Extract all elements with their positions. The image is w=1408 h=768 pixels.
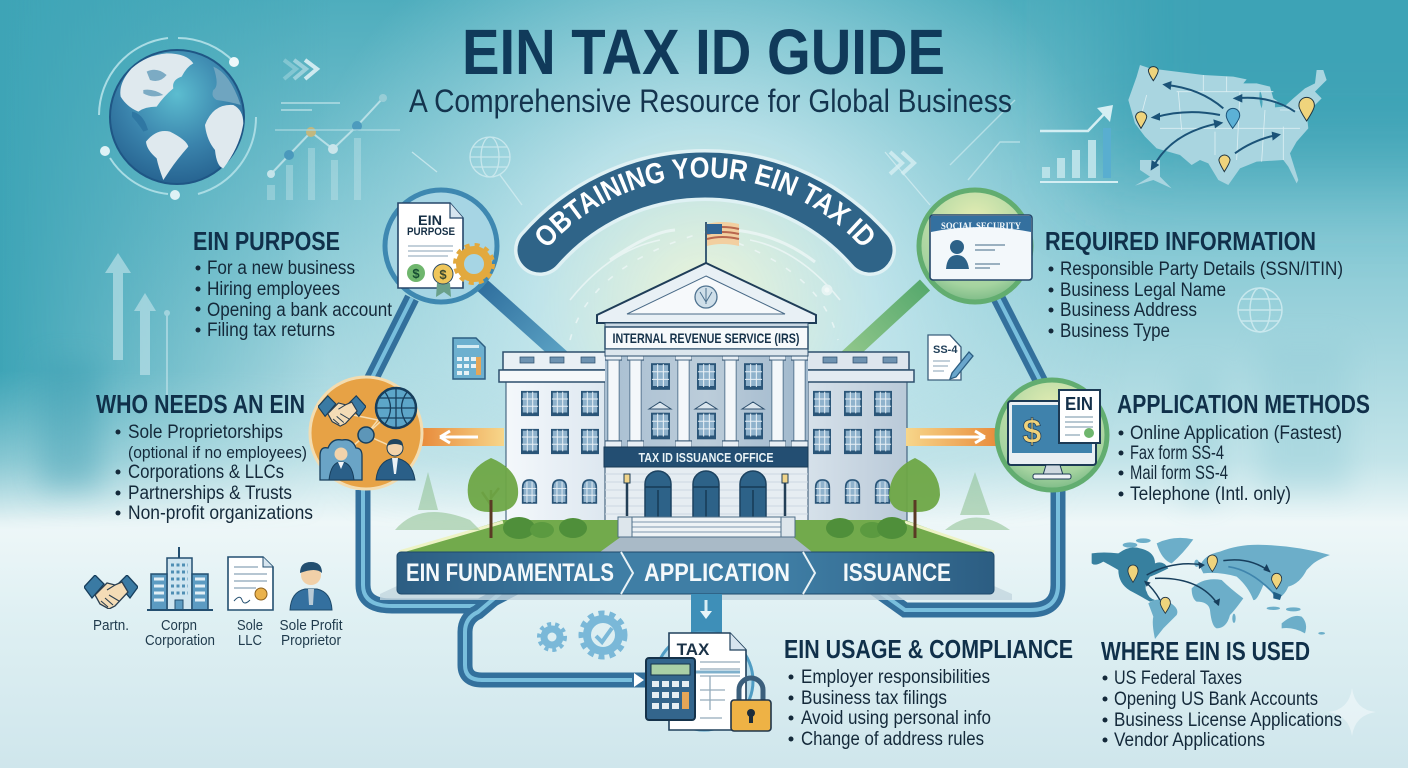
map: world — [1092, 538, 1330, 639]
columns — [605, 355, 808, 448]
label: Sole LLC: LLC — [238, 632, 262, 649]
section: EIN usage and compliance: EIN USAGE & COMPLIANCE — [784, 634, 1073, 664]
icon: handshake — [84, 575, 138, 609]
step: issuance: ISSUANCE — [843, 559, 951, 587]
icon row: entity types — [84, 547, 343, 649]
distant trees — [395, 472, 1010, 530]
icon: application methods circle: $ — [1023, 413, 1042, 451]
icon: EIN purpose circle: EIN — [418, 212, 442, 228]
office sign: TAX ID ISSUANCE OFFICE — [638, 450, 774, 465]
arrow: orange left — [420, 428, 504, 446]
lamps — [627, 479, 785, 516]
flag — [706, 222, 739, 263]
doors — [645, 471, 766, 518]
icon: EIN purpose circle — [385, 190, 497, 302]
icon: person — [290, 562, 332, 610]
step: application: APPLICATION — [644, 559, 790, 587]
light arcs behind building — [570, 230, 840, 340]
section: EIN purpose: EIN PURPOSE — [193, 226, 340, 256]
list: application methods items: Telephone (Intl. only) — [1130, 484, 1291, 505]
list: application methods items — [1118, 423, 1342, 505]
list: required information items: Responsible Party Details (SSN/ITIN) — [1060, 259, 1343, 280]
list: application methods items: Fax form SS-4 — [1130, 443, 1224, 464]
section: who needs an EIN: WHO NEEDS AN EIN — [96, 389, 305, 419]
section: EIN usage and compliance — [784, 634, 1073, 750]
icon: social security circle — [919, 190, 1032, 302]
list: who needs items: (optional if no employees) — [128, 443, 307, 462]
up arrows — [105, 253, 170, 395]
center bay — [605, 352, 808, 449]
connector: down arrow to tax — [691, 594, 722, 642]
pediment — [597, 263, 816, 323]
icon: who needs an EIN circle — [310, 377, 422, 489]
list: usage items: Employer responsibilities — [801, 667, 990, 688]
chevrons top left — [284, 60, 317, 79]
icon: application methods circle — [997, 380, 1107, 490]
list: EIN purpose items — [196, 258, 393, 341]
IRS sign — [605, 327, 808, 349]
list: where used items: US Federal Taxes — [1114, 668, 1242, 689]
icon: gears — [539, 613, 625, 657]
ground floor — [605, 466, 808, 522]
wings — [506, 380, 605, 530]
section: who needs an EIN — [96, 389, 313, 524]
label: Sole LLC — [237, 617, 263, 649]
label: Sole Profit Proprietor — [280, 617, 343, 649]
icon: tax documents — [646, 632, 771, 731]
list: application methods items: Online Application (Fastest) — [1130, 423, 1342, 444]
section: required information: REQUIRED INFORMATION — [1045, 226, 1316, 256]
list: EIN purpose items: Hiring employees — [207, 279, 340, 300]
step: EIN fundamentals: EIN FUNDAMENTALS — [406, 559, 614, 587]
trees and bushes — [468, 458, 940, 539]
list: application methods items: Mail form SS-4 — [1130, 463, 1228, 484]
icon: EIN purpose circle: PURPOSE — [407, 226, 455, 238]
list: required information items: Business Legal Name — [1060, 280, 1226, 301]
map: United States — [1128, 65, 1327, 188]
arrow: orange right — [906, 428, 1000, 446]
list: EIN purpose items: For a new business — [207, 258, 355, 279]
list: usage items: Change of address rules — [801, 729, 984, 750]
icon: globe — [99, 38, 256, 200]
list: usage items: Avoid using personal info — [801, 708, 991, 729]
label: Sole Profit Proprietor: Proprietor — [281, 632, 341, 649]
icon: office building — [147, 547, 213, 610]
right chart — [950, 100, 1118, 182]
list: required information items: Business Address — [1060, 300, 1197, 321]
icon: SS-4 form — [928, 335, 973, 380]
section: application methods — [1117, 389, 1370, 505]
wing windows — [521, 392, 892, 503]
subtitle: A Comprehensive Resource for Global Business — [409, 83, 1012, 119]
title: EIN TAX ID GUIDE — [462, 16, 945, 88]
decorative arrows and charts — [105, 60, 1376, 736]
icon: signed document — [228, 557, 273, 610]
label: Sole Profit Proprietor: Sole Profit — [280, 617, 343, 634]
icon: application methods circle: EIN — [1065, 394, 1093, 414]
icon: EIN purpose circle: $ — [412, 266, 420, 281]
chevrons top right — [890, 152, 914, 174]
icon: calculator — [453, 338, 485, 379]
list: required information items — [1048, 259, 1343, 342]
section: where EIN is used — [1101, 636, 1342, 751]
list: usage items — [788, 667, 991, 750]
list: EIN purpose items: Opening a bank account — [207, 300, 393, 321]
lawn platform — [399, 520, 994, 552]
label: Sole LLC: Sole — [237, 617, 263, 634]
list: who needs items — [116, 422, 313, 524]
list: where used items: Business License Applications — [1114, 710, 1342, 731]
connector: pipes to building — [363, 285, 1058, 687]
list: where used items: Vendor Applications — [1114, 730, 1265, 751]
icon: social security circle: SOCIAL SECURITY — [941, 221, 1021, 231]
label: Partn.: Partn. — [93, 617, 129, 634]
icon: SS-4 form: SS-4 — [933, 344, 958, 356]
list: EIN purpose items: Filing tax returns — [207, 320, 335, 341]
label: Corpn: Corpn — [161, 617, 197, 634]
list: who needs items: Sole Proprietorships — [128, 422, 283, 443]
right faint globe — [1238, 288, 1282, 332]
icon: tax documents: TAX — [677, 640, 710, 659]
list: where used items: Opening US Bank Accounts — [1114, 689, 1318, 710]
steps — [618, 517, 795, 537]
list: who needs items: Partnerships & Trusts — [128, 483, 292, 504]
faint lines top center — [412, 137, 930, 205]
list: required information items: Business Type — [1060, 321, 1170, 342]
office sign — [604, 447, 808, 467]
IRS sign: INTERNAL REVENUE SERVICE (IRS) — [612, 330, 800, 346]
list: where used items — [1102, 668, 1342, 751]
list: who needs items: Corporations & LLCs — [128, 462, 284, 483]
left chart — [267, 94, 400, 200]
list: usage items: Business tax filings — [801, 688, 947, 709]
process band — [380, 552, 1012, 600]
star — [1328, 688, 1376, 736]
icon: EIN purpose circle: $ — [439, 267, 447, 282]
building: Internal Revenue Service — [399, 222, 994, 552]
label: Corporation: Corporation — [145, 632, 215, 649]
list: who needs items: Non-profit organizations — [128, 503, 313, 524]
section: where EIN is used: WHERE EIN IS USED — [1101, 636, 1310, 666]
section: EIN purpose — [193, 226, 393, 341]
section: required information — [1045, 226, 1343, 342]
banner: Obtaining your EIN tax ID: OBTAINING YOUR EIN TAX ID — [536, 157, 874, 245]
